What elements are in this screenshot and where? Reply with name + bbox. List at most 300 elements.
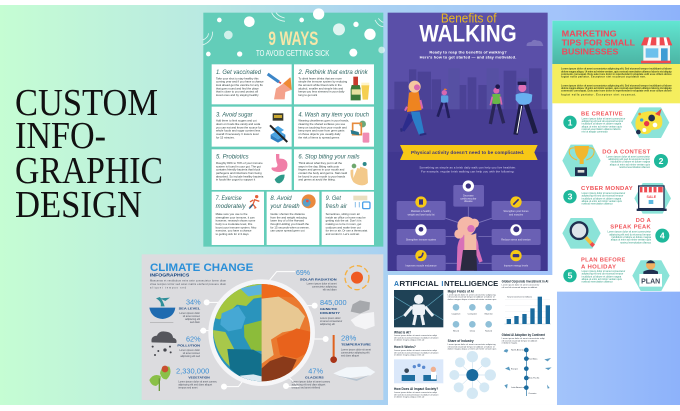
tip 4: do a speak peak: adipiscing elit sed do eiusmod tempor	[609, 233, 651, 236]
tip 1: be creative: BE CREATIVE	[581, 111, 623, 117]
tip 3: cyber monday	[563, 183, 671, 214]
tip 3: cyber monday: CYBER MONDAY	[581, 186, 633, 192]
card 4: wash any item you touch: cleaning the shared surfaces you use	[298, 122, 346, 126]
benefit labels: weight and lose body fat	[408, 214, 435, 217]
stat: sea level: sed diam	[190, 321, 200, 324]
title: custom infographic design	[15, 82, 163, 226]
benefit labels: and muscles	[509, 213, 524, 216]
card 6: stop biting your nails: fingers and germs in your mouth and	[298, 168, 345, 172]
tip 2: do a contest: nostrud exercitation ullamco	[619, 166, 651, 169]
card 4: wash any item you touch: the risk of items to spread germs	[298, 135, 340, 139]
card 7: exercise moderately: to getting sick for 2-3 days	[216, 232, 249, 236]
banner	[400, 145, 538, 160]
image: robot	[394, 290, 443, 327]
heading: climate change: CLIMATE CHANGE	[150, 262, 254, 274]
text: ai by industry: elit sed do eiusmod tempor incididunt ut labore et	[448, 345, 495, 348]
card 9: get fresh air: outdoors and make time out	[326, 225, 361, 229]
card 6: stop biting your nails: ways in the day. Biting nails puts	[298, 164, 340, 168]
tip 1: be creative: adipiscing elit sed do eiusmod tempor	[582, 120, 623, 123]
tip 4: do a speak peak: incididunt ut labore et dolore magna	[611, 236, 652, 239]
panel: benefits of walking	[388, 12, 548, 271]
tip 2: do a contest: adipiscing elit sed do eiusmod tempor	[608, 158, 650, 161]
text: how it works: elit sed do eiusmod tempor incididunt ut labore	[394, 351, 439, 354]
stat: vegetation	[149, 366, 218, 391]
card 1: get vaccinated: coming year and if you have a chance	[216, 80, 264, 84]
tip 2: do a contest: 2	[659, 156, 664, 166]
stat: genetic diversity: GENETIC	[320, 307, 337, 311]
card 1: get vaccinated: loved ones and by staying healthy	[216, 93, 259, 97]
text: how it works: How It Works?	[394, 345, 416, 349]
tip 5: plan before a holiday: PLAN BEFORE	[581, 258, 626, 264]
card 2: rethink that extra drink: 2. Rethink that extra drink	[297, 69, 368, 76]
card 7: exercise moderately: strengthen your immune, it can	[216, 215, 255, 219]
tip 4: do a speak peak: aliqua ut enim ad minim veniam quis	[611, 239, 652, 242]
stat: sea level	[149, 297, 201, 324]
stat: pollution	[151, 331, 201, 358]
card 3: avoid sugar: whole foods and sugar content less	[216, 129, 261, 133]
card 9: get fresh air: inside an office or home may be	[326, 215, 366, 219]
stat: pollution: sit amet consec	[183, 352, 201, 355]
stat: sea level: 34%	[186, 299, 201, 306]
text: share of industry: Lorem ipsum dolor sit amet consectetur adipi	[502, 337, 545, 340]
card 9: get fresh air: getting sick the air. Don't it is	[326, 219, 362, 223]
tip 3: cyber monday: aliqua ut enim ad minim veniam quis	[582, 200, 623, 203]
timeline: continents: North America	[511, 349, 525, 352]
tip 1: be creative: Lorem ipsum dolor sit amet consectetur	[582, 117, 625, 120]
timeline: continents: Oceania	[528, 393, 537, 395]
heading: I	[441, 279, 443, 288]
title: custom infographic design: GRAPHIC	[15, 150, 163, 192]
tip 1: be creative: aliqua ut enim ad minim veniam quis	[582, 125, 623, 128]
tip 4: do a speak peak: nostrud exercitation ullamco	[620, 241, 652, 244]
timeline: continents: Latin America	[511, 386, 525, 389]
card 1: get vaccinated: look ahead get the vaccine for any flu	[216, 83, 263, 87]
stat: genetic diversity: 845,000	[320, 300, 347, 307]
cloud	[527, 40, 543, 46]
stat: solar radiation: 69%	[296, 270, 310, 277]
stat: glaciers: GLACIERS	[305, 375, 324, 379]
panel: artificial intelligence	[388, 275, 557, 405]
card 8: avoid your breath: thought Holding you breath the	[270, 222, 309, 226]
street band	[388, 109, 548, 152]
card 3: avoid sugar	[212, 107, 292, 147]
lower section	[388, 152, 548, 271]
intro yellow band: Lorem ipsum dolor sit amet consectetur adipiscing elit. Sed eiusmod tempor incididunt ut labore	[561, 68, 672, 71]
card 5: probiotics: absorbed. So include healthy bacteria	[216, 174, 264, 178]
card 6: stop biting your nails: be found in your mouth to your hands	[298, 174, 346, 178]
connector lines	[446, 207, 492, 263]
card 1: get vaccinated: Take your shot to stay healthy this	[216, 76, 259, 80]
card 8: avoid your breath	[267, 192, 319, 245]
card 9: get fresh air: and control it. Let's cold air.	[326, 232, 360, 236]
benefit labels: Strengthen immune system	[406, 239, 436, 242]
title: custom infographic design: DESIGN	[15, 184, 142, 226]
card 6: stop biting your nails: Think about what they put in all the	[298, 161, 342, 165]
text: how it works: Lorem ipsum dolor sit amet consectetur adipi	[394, 349, 437, 352]
text: impact: How Does AI Impact Society?	[394, 387, 438, 391]
card 7: exercise moderately: moderately	[216, 203, 246, 210]
intro yellow band: fugiat nulla pariatur. Excepteur sint occaecat.	[561, 93, 636, 96]
card 2: rethink that extra drink: long to get sick	[298, 93, 318, 97]
icons: six fields: Cognitive	[451, 313, 461, 316]
card 7: exercise moderately	[212, 192, 264, 245]
tip 2: do a contest	[562, 145, 668, 177]
decorative germs and dots	[203, 8, 385, 57]
card 8: avoid your breath: for 15 seconds when a sneeze,	[270, 225, 310, 229]
card 6: stop biting your nails: 6. Stop biting your nails	[298, 154, 360, 161]
tip 4: do a speak peak: Lorem ipsum dolor sit amet consectetur	[607, 231, 651, 234]
intro text	[420, 49, 516, 59]
stat: vegetation: tempus sed amet	[178, 386, 198, 389]
heading: MARKETING	[562, 29, 617, 39]
card 2: rethink that extra drink: alcohol, smaller and simple bits and	[298, 86, 344, 90]
text: ai by industry: Share of Industry	[448, 339, 474, 343]
benefit icons	[415, 180, 522, 261]
tip 1: be creative: incididunt ut labore et dolore magna	[582, 123, 622, 126]
intro yellow band: fugiat nulla pariatur. Excepteur sint occaecat cupidatat non.	[561, 76, 646, 79]
card 9: get fresh air: 9. Get	[326, 195, 342, 202]
tip 1: be creative: 1	[568, 117, 573, 127]
benefit labels: disease	[464, 200, 473, 203]
card 2: rethink that extra drink: simple the immune system by reducing	[298, 80, 348, 84]
card 2: rethink that extra drink: the amount white blood cells in the	[298, 83, 342, 87]
benefit labels: cardiovascular	[460, 197, 476, 200]
card 1: get vaccinated	[212, 64, 292, 104]
tip 1: be creative	[563, 107, 669, 138]
card 8: avoid your breath: can cause spread germ out	[270, 229, 305, 233]
heading	[394, 279, 498, 288]
card 4: wash any item you touch	[294, 107, 374, 147]
card 5: probiotics: pathogens and infections from being	[216, 171, 262, 175]
stat: temperature: 28%	[341, 335, 356, 342]
stat: glaciers: Lorem ipsum dolor sit amet consec	[292, 380, 331, 383]
card 9: get fresh air: for ten or air. Or use a thermostat	[326, 229, 368, 233]
tip 4: do a speak peak: 4	[660, 231, 665, 241]
supporting text: For example, regular brisk walking can help you with the following:	[421, 170, 514, 174]
illustration: people at laptops	[394, 359, 443, 383]
walker: small blue top	[438, 89, 449, 118]
heading: walking: WALKING	[419, 21, 517, 48]
text: what is ai	[394, 330, 439, 342]
card 2: rethink that extra drink: keeps you less stressed in your daily	[298, 90, 345, 94]
icon: hand wash	[351, 121, 369, 143]
banner text: Physical activity doesn't need to be complicated.	[411, 150, 524, 155]
text: ai by industry	[448, 339, 496, 351]
chart: global investment bars: Global Corporate Investment in AI	[502, 280, 548, 284]
icon: hand with germs	[350, 162, 368, 185]
stat: solar radiation: consectetur adipiscing	[312, 286, 337, 289]
stat: sea level: SEA LEVEL	[179, 307, 201, 311]
card 8: avoid your breath: from the and weight reducing	[270, 215, 307, 219]
card 5: probiotics: in foods like yogurt to support it	[216, 178, 255, 182]
chart: global investment bars: Lorem ipsum dolor sit amet consectetur	[502, 284, 540, 287]
card 6: stop biting your nails: and germs at avoid the biting.	[298, 178, 336, 182]
icon: window and air	[353, 196, 370, 209]
tip 5: plan before a holiday: aliqua ut enim ad minim veniam quis	[582, 278, 623, 281]
intro yellow band: commodo consequat. Duis aute irure dolor in reprehenderit voluptate velit esse cillum dolore	[561, 73, 672, 76]
text: impact	[394, 387, 439, 399]
card 9: get fresh air: fresh air	[326, 203, 348, 210]
tip 5: plan before a holiday	[563, 258, 670, 291]
text: what is ai: Lorem ipsum dolor sit amet consectetur adipi	[394, 334, 437, 337]
card 6: stop biting your nails: contact the body and germs. Nail could	[298, 171, 348, 175]
benefit labels: Decrease	[463, 195, 474, 198]
card 7: exercise moderately: exercise, you have a chance	[216, 229, 252, 233]
card 5: probiotics: 5. Probiotics	[216, 154, 249, 161]
benefit labels: Reduce stress and tension	[501, 239, 531, 242]
supporting text: Something as simple as a brisk daily walk can help you live healthier.	[419, 165, 516, 169]
card 7: exercise moderately: boost your immune system. Also	[216, 225, 257, 229]
skyline	[394, 68, 542, 112]
stat: vegetation: VEGETATION	[188, 375, 210, 379]
stat: solar radiation	[296, 266, 369, 292]
tip 1: be creative: nisi ut aliquip commodo	[582, 131, 608, 134]
stat: sea level: Lorem ipsum dolor	[179, 312, 200, 315]
card 7: exercise moderately: 7. Exercise	[216, 195, 242, 202]
intro text	[150, 280, 226, 289]
benefit labels: Improve energy levels	[504, 264, 529, 267]
supporting text	[419, 165, 516, 174]
stat: genetic diversity: Lorem ipsum dolor	[320, 317, 341, 320]
stat: temperature	[330, 335, 371, 363]
subheading: TO AVOID GETTING SICK	[256, 48, 330, 58]
icons: six fields: Deep	[470, 331, 476, 333]
text: impact: elit sed do eiusmod tempor incididunt ut labore	[394, 393, 439, 396]
stat: sea level: adipiscing elit	[185, 318, 200, 321]
text: major fields of ai: elit sed do eiusmod tempor incididunt ut labore et	[448, 296, 495, 299]
stat: solar radiation: elit sed diam	[323, 289, 337, 292]
benefit labels: Maintain a healthy	[411, 210, 432, 213]
heading: BUSINESSES	[562, 47, 619, 57]
tip 3: cyber monday: incididunt ut labore et dolore magna	[582, 197, 622, 200]
card 9: get fresh air	[322, 192, 374, 245]
text: major fields of ai: Major Fields of AI	[448, 289, 474, 293]
icon: face with mask	[302, 194, 316, 208]
intro text: vitae tempus tortor sed amet mattis eleifend posuere diam	[150, 283, 226, 286]
text: share of industry: Global AI Adoption by Continent	[502, 333, 546, 337]
walker: blue jacket	[516, 82, 536, 135]
title: custom infographic design: CUSTOM	[15, 82, 158, 124]
card 7: exercise moderately: Make sure you use to the	[216, 212, 248, 216]
text: what is ai: elit sed do eiusmod tempor incididunt ut labore	[394, 336, 439, 339]
card 5: probiotics: contains friendly bacteria that block	[216, 168, 261, 172]
card 8: avoid your breath: lower tiny of of the Harvard	[270, 219, 305, 223]
text: major fields of ai: dolore magna aliqua ut enim ad minim veniam quis	[448, 298, 496, 301]
card 7: exercise moderately: however, research shows some	[216, 219, 256, 223]
icons: six fields: Neural	[453, 330, 460, 333]
text: share of industry: et dolore magna	[502, 342, 518, 345]
timeline: continents: Asia Pacific	[528, 377, 540, 380]
text: how it works: et dolore magna aliqua enim ad	[394, 354, 425, 357]
heading: 9 ways: 9 WAYS	[268, 29, 318, 50]
icon: runner	[249, 195, 259, 208]
stat: genetic diversity: DIVERSITY	[320, 311, 340, 315]
card 3: avoid sugar: 3. Avoid sugar	[216, 111, 253, 118]
card 2: rethink that extra drink: To drink fewer drinks that are more	[298, 76, 342, 80]
connector lines	[200, 272, 323, 387]
card 4: wash any item you touch: keep on touching from your mouth and	[298, 125, 347, 129]
stat: temperature: Lorem ipsum dolor sit amet	[341, 348, 371, 351]
heading: RTIFICIAL	[399, 279, 439, 288]
card 5: probiotics: Roughly 80% to 70% of your immune	[216, 161, 263, 165]
benefit labels: Strengthen your bones	[503, 210, 529, 213]
stat: solar radiation: Lorem ipsum dolor sit amet	[307, 283, 337, 286]
card 1: get vaccinated: that is close to you and protect all	[216, 90, 258, 94]
benefit boxes	[397, 185, 541, 271]
intro yellow band: dolore magna aliqua. Ut enim ad minim veniam, quis nostrud exercitation ullamco laboris nisi aliquip	[561, 87, 672, 90]
tip 5: plan before a holiday: A HOLIDAY	[581, 264, 616, 270]
tip 5: plan before a holiday: 5	[568, 271, 573, 281]
tip 2: do a contest: aliqua ut enim ad minim veniam quis	[610, 163, 651, 166]
chart: global investment bars	[502, 280, 551, 324]
icon: syringe and arm	[268, 74, 292, 99]
card 2: rethink that extra drink	[294, 64, 374, 104]
text: impact: Lorem ipsum dolor sit amet consectetur adipi	[394, 391, 437, 394]
tip 2: do a contest: DO A CONTEST	[602, 149, 651, 155]
subheading: infographics: INFOGRAPHICS	[150, 273, 189, 278]
text: what is ai: et dolore magna aliqua enim ad	[394, 339, 425, 342]
stat: vegetation: 2,330,000	[176, 368, 209, 375]
text: share of industry	[502, 333, 546, 345]
card 4: wash any item you touch: 4. Wash any item you touch	[298, 111, 369, 118]
tip 4: do a speak peak: SPEAK PEAK	[610, 224, 652, 230]
tip 3: cyber monday: 3	[568, 192, 573, 202]
stat: temperature: sed diam aliquet	[341, 354, 359, 357]
tip 5: plan before a holiday: incididunt ut labore et dolore magna	[582, 275, 622, 278]
stat: temperature: consectetur adipiscing elit	[341, 351, 370, 354]
stat: pollution: adipiscing elit sed	[180, 355, 201, 358]
intro text: Ready to reap the benefits of walking?	[429, 49, 507, 54]
card 9: get fresh air: making us to be in room, get	[326, 222, 362, 226]
card 3: avoid sugar: you can eat and know the source for	[216, 125, 262, 129]
card 1: get vaccinated: that goes round and find the place	[216, 86, 259, 90]
intro text: Maecenas et vestibulum enim ante consectetur lorem diam	[150, 280, 226, 283]
card 5: probiotics	[212, 149, 292, 190]
stat: pollution: Lorem ipsum dolor	[179, 349, 200, 352]
heading	[562, 29, 636, 57]
stat: glaciers: tempus sed amet eleifend	[292, 386, 321, 389]
card 6: stop biting your nails	[294, 149, 374, 190]
walker: orange coat	[401, 81, 426, 135]
globe	[208, 279, 315, 386]
heading: NTELLIGENCE	[444, 279, 498, 288]
icons: six fields: Computer	[468, 313, 477, 316]
tip 5: plan before a holiday: adipiscing elit sed do eiusmod tempor	[582, 273, 623, 276]
card 3: avoid sugar: overall if necessary. It lowers level	[216, 132, 259, 136]
header band	[552, 21, 680, 64]
heading: A	[394, 279, 399, 288]
card 4: wash any item you touch: on those objects you usually daily	[298, 132, 341, 136]
stat: vegetation: Lorem ipsum dolor sit amet consec	[178, 380, 218, 383]
title: custom infographic design: INFO-	[15, 115, 106, 157]
tip 5: plan before a holiday: PLAN	[641, 278, 660, 285]
text: what is ai: What Is AI?	[394, 330, 411, 334]
stat: sea level: sit amet consec	[183, 315, 201, 318]
central figure	[454, 217, 483, 271]
card 3: avoid sugar: for 15 minutes.	[216, 135, 235, 139]
faint background towers	[448, 68, 528, 112]
text: share of industry: elit sed do eiusmod tempor incididunt	[502, 339, 538, 342]
stat: genetic diversity: adipiscing elit	[320, 323, 335, 326]
stat: genetic diversity	[320, 300, 375, 329]
intro yellow band	[552, 64, 680, 103]
card 8: avoid your breath: 8. Avoid	[270, 195, 292, 202]
chart: global investment bars: Total investment in billions	[507, 295, 532, 298]
tip 5: plan before a holiday: Lorem ipsum dolor sit amet consectetur	[582, 270, 625, 273]
timeline: continents: East Asia	[528, 357, 538, 360]
tip 3: cyber monday: SALE	[646, 195, 657, 199]
stat: temperature: TEMPERATURE	[341, 343, 371, 347]
tip 4: do a speak peak	[562, 218, 669, 249]
timeline: continents	[504, 348, 552, 396]
tip 1: be creative: nostrud exercitation ullamco laboris	[582, 128, 621, 131]
intro text: Here's how to get started — and stay motivated.	[420, 54, 516, 59]
diagram: industry hub	[449, 351, 496, 399]
intro yellow band: commodo consequat. Duis aute irure dolor in reprehenderit voluptate velit esse cillum dolore	[561, 90, 672, 93]
heading: TIPS FOR SMALL	[562, 38, 636, 48]
stat: glaciers	[292, 367, 375, 389]
card 8: avoid your breath: your breath	[269, 203, 300, 210]
tip 3: cyber monday: adipiscing elit sed do eiusmod tempor	[582, 195, 623, 198]
card 9: get fresh air: Sometimes, sitting room air	[326, 212, 360, 216]
icons: six fields: Natural	[485, 330, 493, 333]
card 4: wash any item you touch: keep eyes and nose from germ parts	[298, 129, 345, 133]
tip 2: do a contest: Lorem ipsum dolor sit amet consectetur	[606, 155, 650, 158]
icon: bottle and beer	[351, 77, 369, 100]
benefit labels: Improves muscle endurance	[405, 264, 437, 267]
icon: storefront	[641, 37, 672, 63]
timeline: continents: Europe	[511, 367, 519, 370]
card 4: wash any item you touch: Wearing cleanliness goes in your hands,	[298, 119, 349, 123]
chart: global investment bars: elit sed do eiusmod tempor incididunt	[502, 286, 538, 289]
icon: stomach and leaf	[271, 154, 287, 183]
card 3: avoid sugar: down on foods like candy and soda	[216, 122, 261, 126]
card 5: probiotics: system is found in your gut. The gut	[216, 164, 261, 168]
panel: 9 ways to avoid getting sick	[203, 8, 385, 247]
text: how it works	[394, 345, 439, 357]
text: ai by industry: Lorem ipsum dolor sit amet consectetur adipiscing	[448, 343, 496, 346]
text: impact: et dolore magna aliqua enim ad	[394, 396, 425, 399]
walker: green top	[490, 84, 504, 124]
panel: marketing tips for small businesses	[552, 21, 680, 292]
icons: six fields: Machine	[485, 314, 494, 316]
benefit labels	[405, 195, 531, 267]
intro yellow band: dolore magna aliqua. Ut enim ad minim veniam, quis nostrud exercitation ullamco laboris nisi aliquip	[561, 70, 672, 73]
intro yellow band: Lorem ipsum dolor sit amet consectetur adipiscing elit. Sed eiusmod tempor incididunt ut labore	[561, 84, 672, 87]
tip 4: do a speak peak: DO A	[636, 218, 651, 224]
card 1: get vaccinated: 1. Get vaccinated	[216, 69, 261, 76]
card 3: avoid sugar: Add there to limit sugars and cut	[216, 119, 257, 123]
stat: solar radiation: SOLAR RADIATION	[300, 278, 337, 282]
tip 5: plan before a holiday: nostrud exercitation ullamco	[582, 281, 613, 284]
icon: sugar cubes	[270, 113, 287, 143]
card 7: exercise moderately: body is a moderate level, this	[216, 222, 253, 226]
stat: glaciers: adipiscing elit sed diam aliquet	[292, 383, 326, 386]
tip 3: cyber monday: Lorem ipsum dolor sit amet consectetur	[582, 192, 625, 195]
tip 2: do a contest: incididunt ut labore et dolore magna	[610, 161, 651, 164]
icons: six fields	[451, 304, 494, 333]
heading: benefits of: Benefits of	[441, 12, 497, 26]
stat: pollution: 62%	[186, 337, 201, 344]
text: major fields of ai	[448, 289, 496, 301]
panel: climate change	[142, 254, 383, 400]
intro text: aliquet tempus sed	[150, 286, 187, 289]
text: ai by industry: dolore magna aliqua ut enim ad minim veniam quis	[448, 348, 496, 351]
card 8: avoid your breath: Guide: shorten the distance	[270, 212, 305, 216]
text: major fields of ai: Lorem ipsum dolor sit amet consectetur adipiscing	[448, 293, 496, 296]
connector dots	[200, 299, 329, 390]
stat: vegetation: adipiscing elit sed diam aliquet	[178, 383, 212, 386]
